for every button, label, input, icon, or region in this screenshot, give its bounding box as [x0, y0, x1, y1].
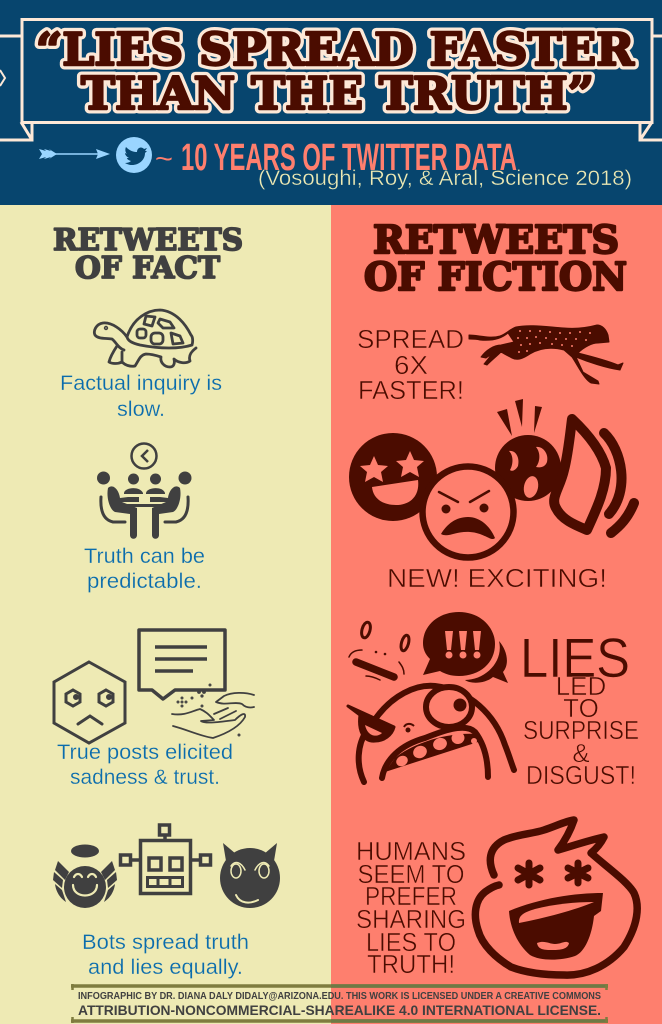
caption: truth predictable: predictable.	[87, 570, 202, 593]
caption: factual inquiry: Factual inquiry is	[60, 372, 222, 395]
icon: robot	[120, 825, 210, 894]
caption: true posts: sadness & trust.	[70, 766, 220, 789]
icon: speech bubble	[139, 630, 225, 699]
icon: exclamation speech bubbles	[423, 612, 508, 683]
icon: angel face	[53, 844, 117, 908]
footer credit: ATTRIBUTION-NONCOMMERCIAL-SHAREALIKE 4.0 INTERNATIONAL LICENSE.	[78, 1002, 601, 1018]
caption: true posts	[57, 741, 233, 789]
icon: arrow	[39, 149, 110, 159]
text: spread 6x faster: 6X	[394, 350, 428, 380]
text: lies led to surprise and disgust: DISGUST!	[526, 760, 636, 790]
icon: star eyes face	[349, 433, 437, 521]
text: lies led to surprise and disgust	[520, 626, 639, 790]
heading: retweets of fiction: OF FICTION	[364, 254, 627, 299]
tilde: ~	[155, 143, 173, 174]
text: new exciting: NEW! EXCITING!	[387, 563, 607, 593]
caption: bots: and lies equally.	[88, 956, 243, 979]
text: lies led to surprise and disgust: &	[572, 738, 590, 768]
title: “LIES SPREAD FASTER	[36, 23, 635, 76]
icon: shocked splatter face	[349, 621, 410, 680]
text: humans prefer lies: TRUTH!	[367, 949, 455, 979]
panel: retweets of fact	[0, 205, 331, 1024]
icon: meeting table with clock	[97, 444, 192, 539]
title banner ribbon	[0, 20, 662, 140]
caption: bots	[82, 931, 249, 979]
caption: factual inquiry	[60, 372, 222, 421]
text: spread 6x faster: SPREAD	[357, 324, 464, 354]
heading: retweets of fact: RETWEETS	[53, 223, 243, 258]
panel: retweets of fiction	[331, 205, 662, 1024]
heading: retweets of fiction: RETWEETS	[373, 217, 619, 262]
text: humans prefer lies: LIES TO	[366, 927, 456, 957]
panel: header	[0, 0, 662, 205]
icon: angry face	[422, 466, 514, 558]
text: lies led to surprise and disgust: TO	[563, 693, 599, 723]
icon: cheetah	[469, 325, 623, 384]
caption: truth predictable	[84, 545, 205, 593]
icon: devil face	[220, 843, 280, 908]
heading: retweets of fact: OF FACT	[75, 251, 221, 286]
heading: retweets of fiction	[364, 217, 627, 299]
icon: flame and motion arcs	[554, 419, 634, 533]
text: humans prefer lies	[356, 836, 466, 979]
heading: retweets of fact	[53, 223, 243, 286]
caption: bots: Bots spread truth	[82, 931, 249, 954]
text: lies led to surprise and disgust: LED	[556, 671, 606, 701]
title: THAN THE TRUTH”	[81, 67, 594, 120]
text: humans prefer lies: HUMANS	[356, 836, 466, 866]
icon: surprised face	[495, 399, 561, 501]
text: lies led to surprise and disgust: SURPRISE	[523, 715, 639, 745]
text: lies led to surprise and disgust: LIES	[520, 626, 630, 689]
text: humans prefer lies: SEEM TO	[358, 859, 464, 889]
text: spread 6x faster	[357, 324, 464, 405]
icon: sad hexagon face	[54, 662, 125, 743]
caption: truth predictable: Truth can be	[84, 545, 205, 568]
title: THAN THE TRUTH”	[81, 67, 594, 120]
icon: twitter bird	[116, 137, 152, 173]
title: “LIES SPREAD FASTER	[36, 23, 635, 76]
icon: rage face	[348, 686, 514, 782]
icon: laughing dizzy face	[475, 820, 637, 975]
caption: factual inquiry: slow.	[117, 398, 165, 421]
caption: true posts: True posts elicited	[57, 741, 233, 764]
citation: (Vosoughi, Roy, & Aral, Science 2018)	[258, 167, 632, 190]
text: humans prefer lies: SHARING	[356, 904, 466, 934]
footer credit: INFOGRAPHIC BY DR. DIANA DALY DIDALY@ARIZONA.EDU. THIS WORK IS LICENSED UNDER A CREATIVE COMMONS	[78, 991, 601, 1002]
text: spread 6x faster: FASTER!	[358, 375, 464, 405]
title	[36, 23, 635, 120]
text: humans prefer lies: PREFER	[365, 881, 457, 911]
footer credit	[71, 984, 608, 1023]
icon: turtle	[94, 310, 196, 367]
icon: hands sharing	[172, 684, 254, 738]
